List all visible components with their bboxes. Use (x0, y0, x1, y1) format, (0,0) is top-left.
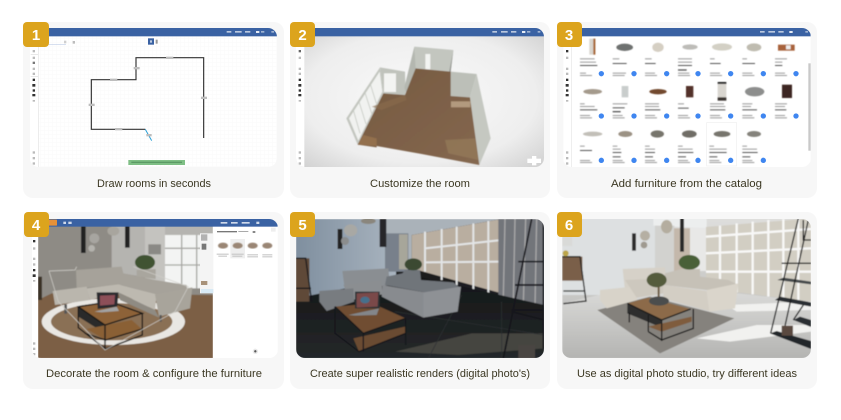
add buttons (599, 71, 799, 163)
panel: step 2 customize the room (290, 22, 550, 198)
catalog screenshot (563, 28, 811, 167)
number badge 4: 4 (32, 217, 41, 234)
bright living room render (562, 218, 811, 358)
number badge 3: 3 (565, 27, 573, 44)
3D room screenshot (296, 28, 544, 167)
card background (557, 212, 817, 389)
number badge 2: 2 (298, 27, 307, 44)
caption: Draw rooms in seconds (97, 178, 211, 190)
panel: step 3 furniture catalog (557, 22, 817, 198)
product thumbnails (583, 39, 795, 138)
product descriptions (580, 58, 787, 163)
number badge 6 (557, 212, 582, 237)
infographic: six step room design workflow (23, 22, 811, 380)
card background (23, 22, 284, 198)
3D editor with sofa screenshot (32, 219, 278, 358)
panel: step 6 digital photo studio (557, 212, 817, 389)
caption: Decorate the room & configure the furniture (46, 368, 262, 380)
card background (557, 22, 817, 198)
caption: Create super realistic renders (digital photo's) (310, 368, 530, 380)
caption: Add furniture from the catalog (611, 178, 762, 190)
number badge 6: 6 (565, 217, 573, 234)
number badge 5 (290, 212, 315, 237)
caption: Customize the room (370, 178, 470, 190)
number badge 1 (23, 22, 49, 47)
number badge 5: 5 (298, 217, 307, 234)
card background (290, 22, 550, 198)
caption: Use as digital photo studio, try different ideas (577, 368, 798, 380)
dark living room render (296, 218, 544, 358)
number badge 2 (290, 22, 315, 47)
number badge 1: 1 (32, 27, 40, 44)
panel: step 1 draw rooms (23, 22, 284, 198)
number badge 3 (557, 22, 582, 47)
panel: step 5 realistic renders (290, 212, 550, 389)
number badge 4 (24, 212, 49, 237)
card background (290, 212, 550, 389)
floor plan editor screenshot (30, 28, 277, 167)
card background (23, 212, 284, 389)
panel: step 4 decorate and configure (23, 212, 284, 389)
